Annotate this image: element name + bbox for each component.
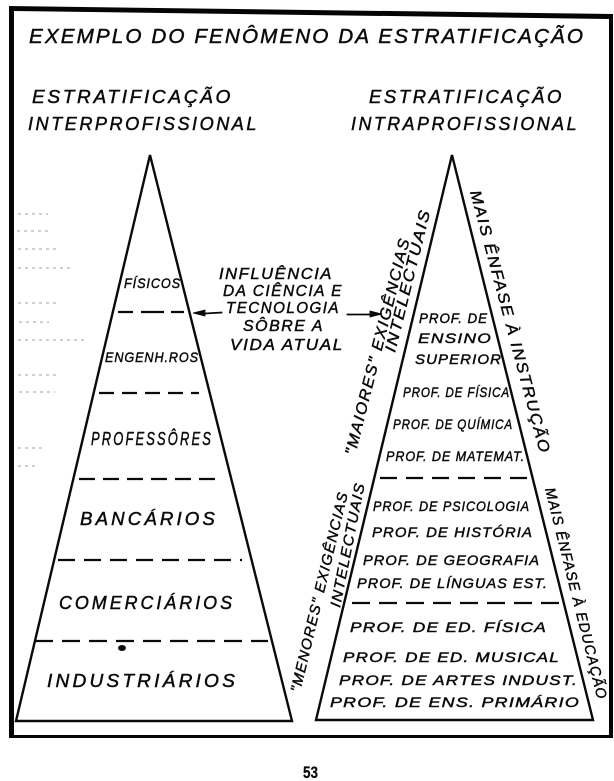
lower tier labels: PROF. DE ENS. PRIMÁRIO	[330, 694, 580, 710]
label: industriários: INDUSTRIÁRIOS	[47, 671, 238, 691]
side label: maiores exigências intelectuais: "MAIORES" EXIGÊNCIAS	[342, 236, 414, 457]
upper tier labels: PROF. DE MATEMAT.	[386, 448, 525, 464]
upper tier labels	[386, 310, 525, 464]
middle tier labels: PROF. DE HISTÓRIA	[372, 524, 533, 540]
upper tier labels: PROF. DE	[419, 310, 488, 326]
lower tier labels: PROF. DE ED. FÍSICA	[350, 619, 547, 635]
side label: maiores exigências intelectuais	[342, 207, 434, 457]
lower tier labels: PROF. DE ARTES INDUST.	[339, 672, 578, 688]
heading: interprofessional stratification: INTERPROFISSIONAL	[28, 114, 259, 134]
pyramid outline	[316, 155, 593, 720]
central callout: influence of science and technology: SÔBRE A	[243, 318, 324, 335]
middle tier labels: PROF. DE LÍNGUAS EST.	[357, 575, 548, 591]
arrow: to left pyramid	[193, 310, 222, 316]
left pyramid: interprofessional	[16, 155, 292, 721]
heading: intraprofessional stratification: INTRAPROFISSIONAL	[351, 114, 579, 134]
central callout: influence of science and technology: DA CIÊNCIA E	[223, 283, 343, 300]
central callout: influence of science and technology: TECNOLOGIA	[226, 300, 340, 317]
label: professores: PROFESSÔRES	[91, 428, 213, 449]
side label: menores exigências intelectuais: INTELECTUAIS	[328, 481, 369, 609]
upper tier labels: PROF. DE QUÍMICA	[393, 416, 513, 432]
upper tier labels: PROF. DE FÍSICA	[403, 384, 510, 400]
side label: menores exigências intelectuais: "MENORES" EXIGÊNCIAS	[287, 490, 352, 694]
label: engenheiros: ENGENH.ROS	[105, 349, 199, 365]
central callout: influence of science and technology: VIDA ATUAL	[230, 337, 344, 354]
side label: maiores exigências intelectuais: INTELECTUAIS	[382, 207, 434, 354]
label: comerciários: COMERCIÁRIOS	[59, 593, 235, 613]
central callout: influence of science and technology	[219, 266, 344, 354]
title: EXEMPLO DO FENÔMENO DA ESTRATIFICAÇÃO	[29, 24, 585, 48]
heading: intraprofessional stratification: ESTRATIFICAÇÃO	[369, 86, 564, 107]
middle tier labels: PROF. DE GEOGRAFIA	[363, 552, 540, 568]
side label: mais ênfase à educação: MAIS ÊNFASE À EDUCAÇÃO	[541, 486, 610, 701]
label: bancários: BANCÁRIOS	[80, 509, 218, 529]
central callout: influence of science and technology: INFLUÊNCIA	[219, 266, 333, 283]
pyramid outline	[16, 155, 292, 721]
heading: intraprofessional stratification	[351, 86, 579, 134]
ink blot	[118, 645, 126, 651]
lower tier labels	[330, 619, 580, 710]
lower tier labels: PROF. DE ED. MUSICAL	[343, 649, 560, 665]
upper tier labels: ENSINO	[418, 330, 492, 346]
heading: interprofessional stratification: ESTRATIFICAÇÃO	[32, 86, 233, 107]
heading: interprofessional stratification	[28, 86, 259, 134]
label: físicos: FÍSICOS	[124, 275, 181, 291]
side label: mais ênfase à instrução: MAIS ÊNFASE À INSTRUÇÃO	[466, 189, 553, 456]
arrow: to right pyramid	[347, 311, 382, 317]
middle tier labels: PROF. DE PSICOLOGIA	[373, 498, 530, 514]
middle tier labels	[357, 498, 548, 591]
upper tier labels: SUPERIOR	[415, 351, 502, 367]
right pyramid: intraprofessional	[316, 155, 593, 720]
